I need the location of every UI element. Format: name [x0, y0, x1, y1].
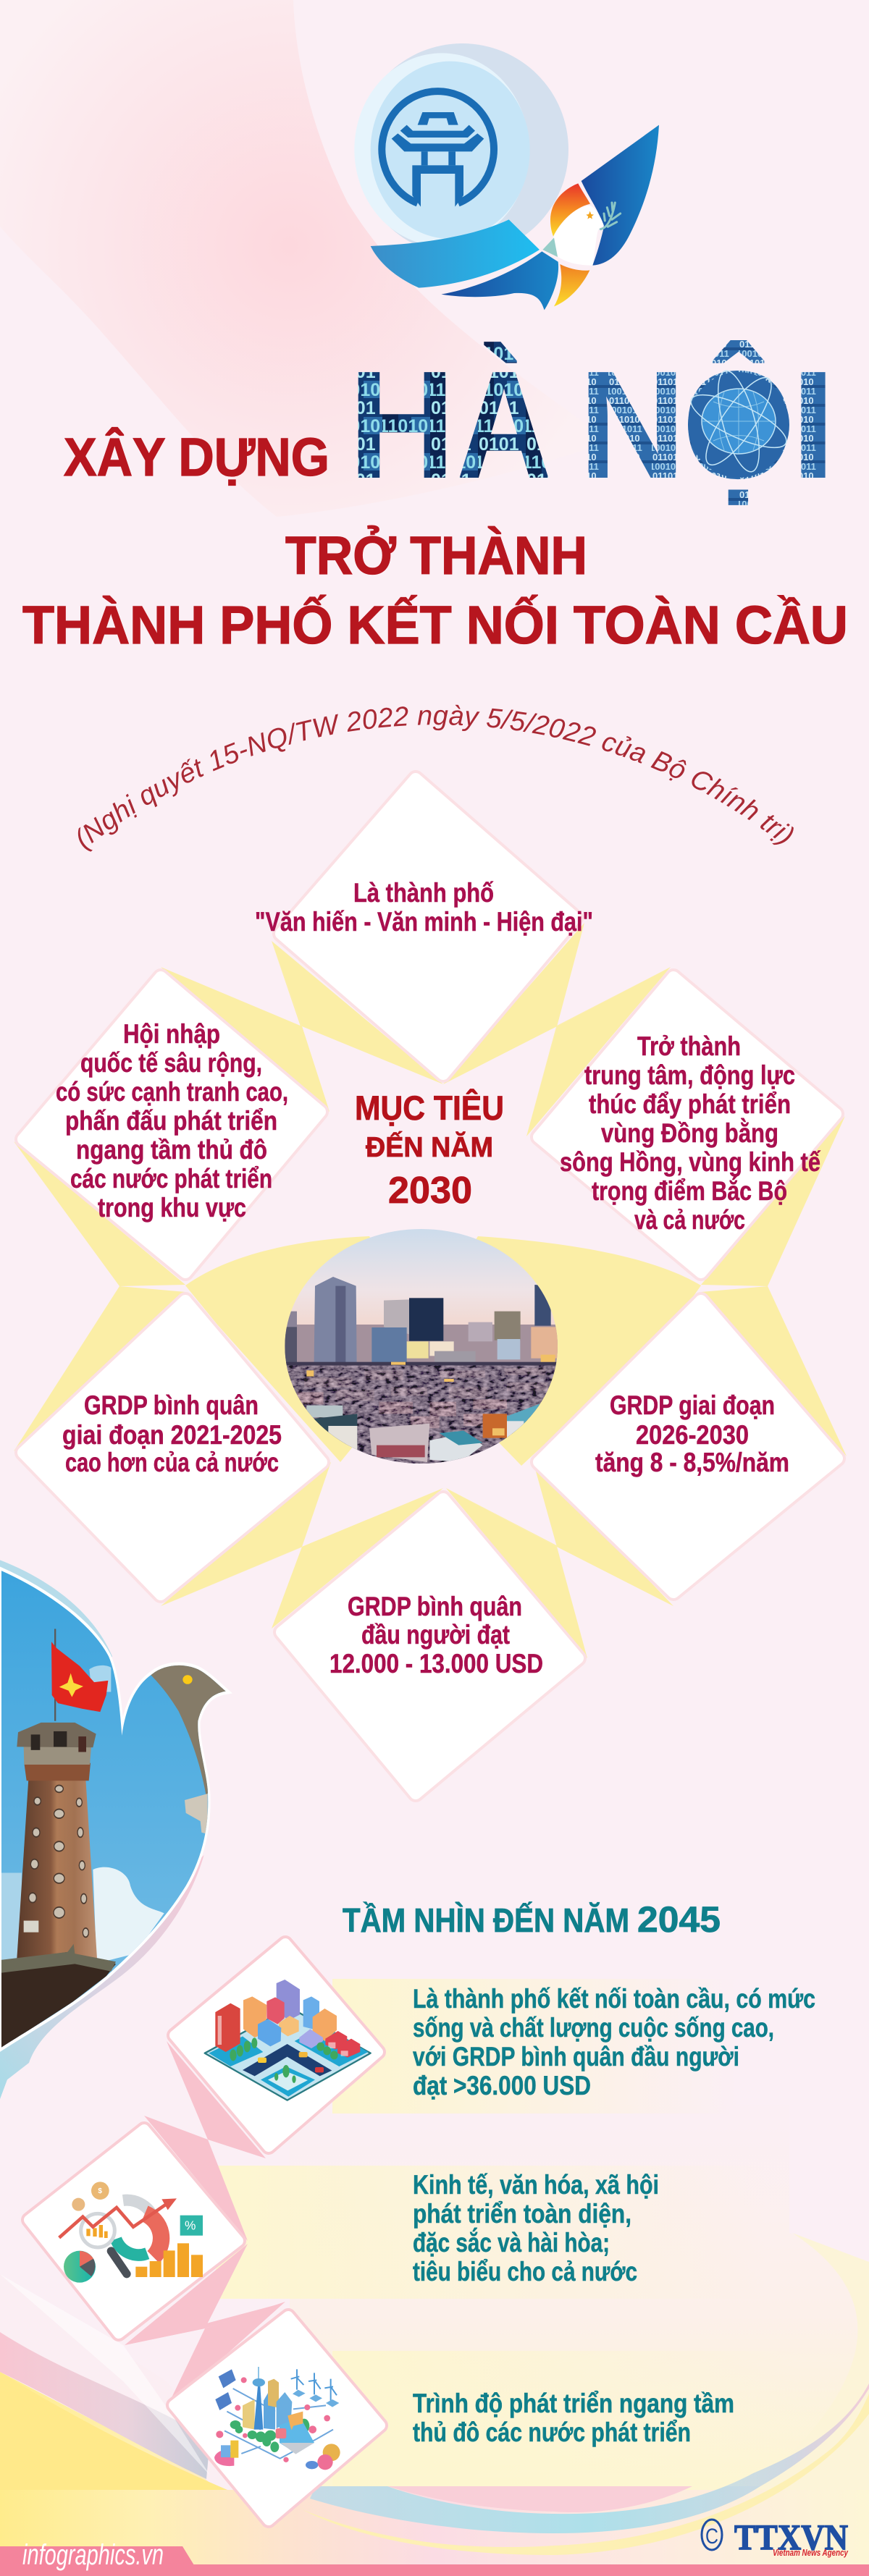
icon: charts and growth	[59, 2182, 203, 2283]
logo: dove and Hanoi emblem	[354, 43, 659, 310]
panel: vision 1 diamond	[175, 1943, 378, 2147]
upper wing	[582, 125, 659, 266]
icon: isometric city	[205, 1980, 371, 2100]
tower shaft	[17, 1779, 97, 1959]
subtitle on arc: (Nghị quyết 15-NQ/TW 2022 ngày 5/5/2022 của Bộ Chính trị)	[78, 705, 794, 852]
heading: goals to 2030	[355, 1089, 504, 1212]
goal 3 text: thúc đẩy phát triển	[589, 1089, 791, 1119]
goal 1 text	[255, 878, 593, 937]
heading: goals to 2030: 2030	[388, 1170, 472, 1212]
title: TRỞ THÀNH: TRỞ THÀNH	[285, 525, 587, 586]
vision 2 text: đặc sắc và hài hòa;	[413, 2227, 610, 2258]
background: bottom swooshes	[0, 2099, 869, 2576]
title: THÀNH PHỐ KẾT NỐI TOÀN CẦU: THÀNH PHỐ KẾT NỐI TOÀN CẦU	[22, 595, 848, 655]
logo backdrop circles	[354, 43, 568, 256]
vision 1 text: đạt >36.000 USD	[413, 2071, 591, 2100]
buildings	[277, 1980, 300, 2021]
title: HÀ NỘI with digital texture: À	[456, 339, 552, 510]
goal 2 text: phấn đấu phát triển	[65, 1106, 277, 1136]
panel: goal 4 diamond (lower left)	[23, 1301, 322, 1595]
background swoosh: top-left pink ribbon	[0, 0, 608, 517]
panel: goal 6 diamond (bottom)	[282, 1499, 578, 1794]
olive branch	[600, 203, 621, 229]
icon: globe with orbits	[684, 367, 793, 478]
goal 3 text: trọng điểm Bắc Bộ	[592, 1175, 787, 1206]
title: HÀ NỘI with digital texture: Ộ	[682, 339, 794, 510]
heading: goals to 2030: ĐẾN NĂM	[366, 1131, 493, 1163]
goal 2 text: trong khu vực	[98, 1193, 246, 1222]
goal 2 text: quốc tế sâu rộng,	[80, 1048, 262, 1078]
vision 3 text	[413, 2389, 734, 2447]
goal 2 text: Hội nhập	[123, 1019, 220, 1049]
star: yellow wedges behind goals	[14, 923, 847, 1658]
vision 2 text	[413, 2170, 659, 2286]
goal 6 text: đầu người đạt	[361, 1620, 510, 1650]
heading: vision to 2045: 2045	[637, 1899, 721, 1940]
panel: goal 1 diamond	[255, 779, 593, 1074]
lower wing	[441, 251, 558, 310]
goal 4 text: giai đoạn 2021-2025	[62, 1420, 282, 1450]
goal 1 text: Là thành phố	[353, 878, 494, 908]
dove head plumage	[550, 183, 590, 237]
goal 2 text: ngang tầm thủ đô	[76, 1135, 267, 1165]
goal 3 text: và cả nước	[634, 1205, 745, 1235]
title: HÀ NỘI with digital texture: H	[348, 339, 456, 510]
goal 3 text: sông Hồng, vùng kinh tế	[560, 1147, 820, 1177]
pink wedges behind vision diamonds	[125, 2041, 285, 2408]
clouds	[93, 1867, 164, 1964]
logo: copyright TTXVN: TTXVN	[734, 2517, 848, 2557]
panel: goal 5 diamond (lower right)	[539, 1301, 837, 1592]
goal 5 text: 2026-2030	[636, 1420, 749, 1450]
panel: vision 3 diamond	[174, 2316, 380, 2520]
icon: charts and growth: $	[98, 2187, 102, 2195]
goal 4 text: GRDP bình quân	[84, 1390, 259, 1420]
vision 1 text	[413, 1984, 815, 2100]
dove head	[151, 1663, 228, 1797]
flagpole	[54, 1629, 56, 1721]
title: XÂY DỰNG: XÂY DỰNG	[64, 427, 329, 487]
trees	[230, 2037, 338, 2083]
goal 3 text: Trở thành	[637, 1031, 741, 1061]
right-side orb	[290, 2099, 869, 2490]
goal 5 text	[595, 1390, 789, 1477]
footer tag	[0, 2546, 194, 2565]
tail	[554, 264, 589, 306]
goal 3 text	[560, 1031, 820, 1235]
photo: Hanoi skyline in a circle	[285, 1229, 558, 1464]
goal 1 text: "Văn hiến - Văn minh - Hiện đại"	[255, 907, 593, 937]
flag	[51, 1642, 108, 1712]
goal 5 text: GRDP giai đoạn	[610, 1390, 775, 1420]
goal 2 text: các nước phát triển	[70, 1164, 272, 1194]
panel: vision 2 diamond	[29, 2129, 238, 2334]
ribbon	[371, 219, 540, 288]
goal 4 text: cao hơn của cả nước	[65, 1448, 279, 1477]
heading: vision to 2045: TẦM NHÌN ĐẾN NĂM	[343, 1901, 629, 1939]
tower windows	[29, 1786, 88, 1937]
goal 3 text: vùng Đồng bằng	[601, 1118, 778, 1148]
dove body	[553, 206, 604, 266]
vision 2 text: phát triển toàn diện,	[413, 2199, 631, 2229]
icon: Hanoi gate emblem	[382, 91, 494, 207]
title: HÀ NỘI with digital texture: I	[790, 339, 836, 510]
goal 4 text	[62, 1390, 282, 1477]
photo: Flag Tower in dove shape	[0, 1556, 241, 2099]
footer site name: infographics.vn	[22, 2539, 164, 2571]
vision 1 text: sống và chất lượng cuộc sống cao,	[413, 2013, 774, 2043]
icon: charts and growth: %	[185, 2218, 196, 2233]
goal 6 text	[329, 1592, 543, 1678]
rampart	[0, 1952, 116, 2049]
goal 3 text: trung tâm, động lực	[584, 1060, 795, 1090]
vision 3 text: thủ đô các nước phát triển	[413, 2417, 691, 2447]
heading: goals to 2030: MỤC TIÊU	[355, 1089, 504, 1127]
goal 6 text: GRDP bình quân	[348, 1592, 522, 1621]
title: HÀ NỘI with digital texture	[348, 339, 836, 510]
panel: goal 2 diamond (left)	[23, 977, 320, 1272]
goal 6 text: 12.000 - 13.000 USD	[329, 1649, 543, 1678]
goal 5 text: tăng 8 - 8,5%/năm	[595, 1448, 789, 1477]
icon: smart city	[214, 2367, 340, 2470]
panel: goal 3 diamond (right)	[539, 977, 836, 1272]
vision 2 text: tiêu biểu cho cả nước	[413, 2257, 637, 2286]
dove lower band	[0, 1855, 204, 2099]
dove upper band	[0, 1560, 112, 1661]
footer bar	[0, 2564, 869, 2576]
bands	[302, 2394, 869, 2555]
vision 3 text: Trình độ phát triển ngang tầm	[413, 2389, 734, 2418]
cars	[258, 2058, 266, 2063]
logo: copyright TTXVN: C	[705, 2525, 718, 2548]
goal 2 text: có sức cạnh tranh cao,	[56, 1077, 288, 1107]
title: HÀ NỘI with digital texture: N	[579, 339, 686, 510]
vision 2 text: Kinh tế, văn hóa, xã hội	[413, 2170, 659, 2200]
vision 1 text: với GRDP bình quân đầu người	[413, 2042, 739, 2072]
vision text bands	[216, 1979, 796, 2486]
goal 2 text	[56, 1019, 288, 1222]
